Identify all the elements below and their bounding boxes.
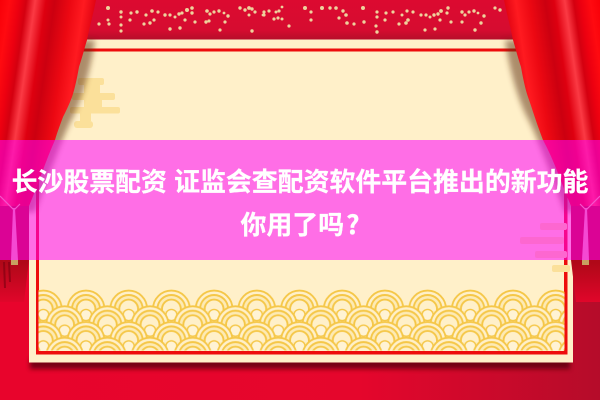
title text: 你用了吗? xyxy=(241,204,359,242)
gold confetti dots xyxy=(97,6,502,34)
right cloud ornament xyxy=(520,223,570,272)
left curtain shadow xyxy=(23,40,95,212)
cream frame xyxy=(29,40,573,362)
cream frame shadow xyxy=(30,359,570,369)
left cloud ornament xyxy=(70,78,120,128)
title text xyxy=(12,168,588,242)
right curtain xyxy=(504,0,600,302)
red frame border xyxy=(0,48,600,354)
pink title band xyxy=(0,140,600,260)
left curtain xyxy=(0,0,96,302)
wave scallop pattern xyxy=(38,290,564,350)
top red banner xyxy=(0,0,600,40)
right curtain shadow xyxy=(505,40,577,212)
title text: 长沙股票配资 证监会查配资软件平台推出的新功能 xyxy=(12,169,588,197)
